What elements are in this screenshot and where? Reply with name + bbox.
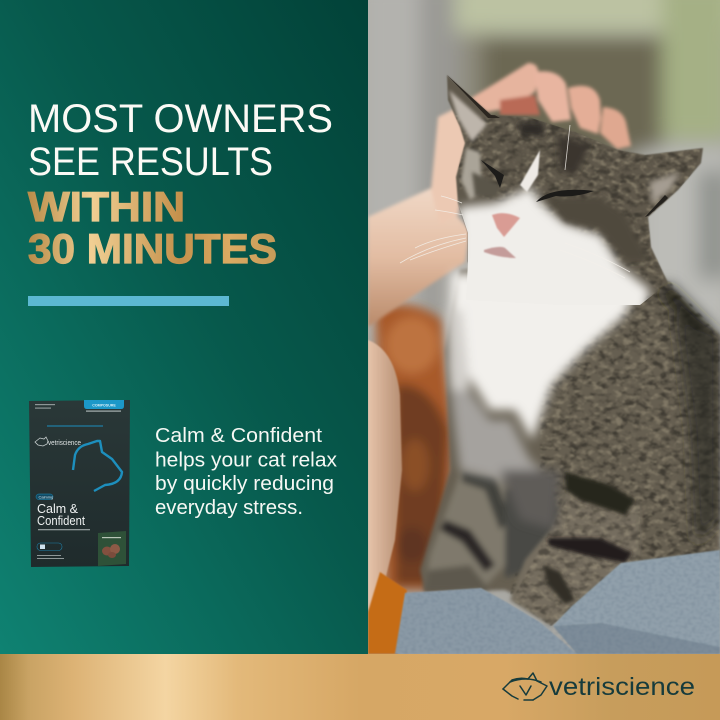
panel: green background xyxy=(0,0,368,654)
pouch blue tab: COMPOSURE xyxy=(92,404,116,408)
blanket xyxy=(395,550,720,654)
inner left ear xyxy=(449,90,487,142)
cat right eye xyxy=(536,190,594,202)
orange shirt xyxy=(368,572,407,654)
blue divider bar xyxy=(28,296,229,306)
pouch product name: Confident xyxy=(37,514,85,528)
product description: by quickly reducing xyxy=(155,473,334,495)
logo icon: cat and dog xyxy=(503,673,547,700)
pouch size badge xyxy=(37,543,62,550)
cat flank shadow xyxy=(660,283,720,545)
product pouch: Calm & Confident xyxy=(29,400,130,567)
gold footer bar xyxy=(0,654,720,720)
vetriscience logo xyxy=(503,673,695,701)
cat left foreleg xyxy=(424,468,565,592)
white muzzle xyxy=(458,183,656,305)
cat left eye xyxy=(481,160,504,188)
cat body xyxy=(420,250,720,626)
photo: hand petting tabby cat xyxy=(360,0,720,654)
pouch logo: vetriscience xyxy=(48,440,81,447)
arm and hand xyxy=(368,63,631,327)
product description: everyday stress. xyxy=(155,497,303,519)
product description: Calm & Confident xyxy=(155,425,322,447)
logo wordmark: vetriscience xyxy=(549,673,695,701)
orange cushion xyxy=(375,304,455,590)
knee xyxy=(368,340,402,610)
pouch product name: Calm & xyxy=(37,502,79,516)
pouch product name xyxy=(37,502,85,528)
pouch chew window xyxy=(98,531,126,566)
cat ear shadow xyxy=(645,195,668,217)
white chest bib xyxy=(446,272,640,530)
whiskers xyxy=(400,125,630,278)
heading line: most owners: MOST OWNERS xyxy=(28,97,333,141)
pouch cat outline xyxy=(73,441,122,491)
product description: helps your cat relax xyxy=(155,450,337,472)
heading line: 30 minutes: 30 MINUTES xyxy=(28,225,277,272)
cat mouth xyxy=(484,247,516,258)
pouch blue tab xyxy=(84,400,124,409)
inner right ear xyxy=(650,172,680,204)
pouch calming tag: Calming xyxy=(38,495,53,500)
heading line: within: WITHIN xyxy=(28,183,185,230)
white blaze xyxy=(520,150,540,192)
cat head xyxy=(447,75,703,330)
cat nose xyxy=(492,213,520,237)
product description xyxy=(155,425,337,519)
heading: most owners see results within 30 minutes xyxy=(28,97,333,272)
photo background xyxy=(360,0,720,340)
heading line: see results: SEE RESULTS xyxy=(28,140,273,184)
pouch logo xyxy=(35,437,81,447)
cat right foreleg xyxy=(510,488,640,626)
